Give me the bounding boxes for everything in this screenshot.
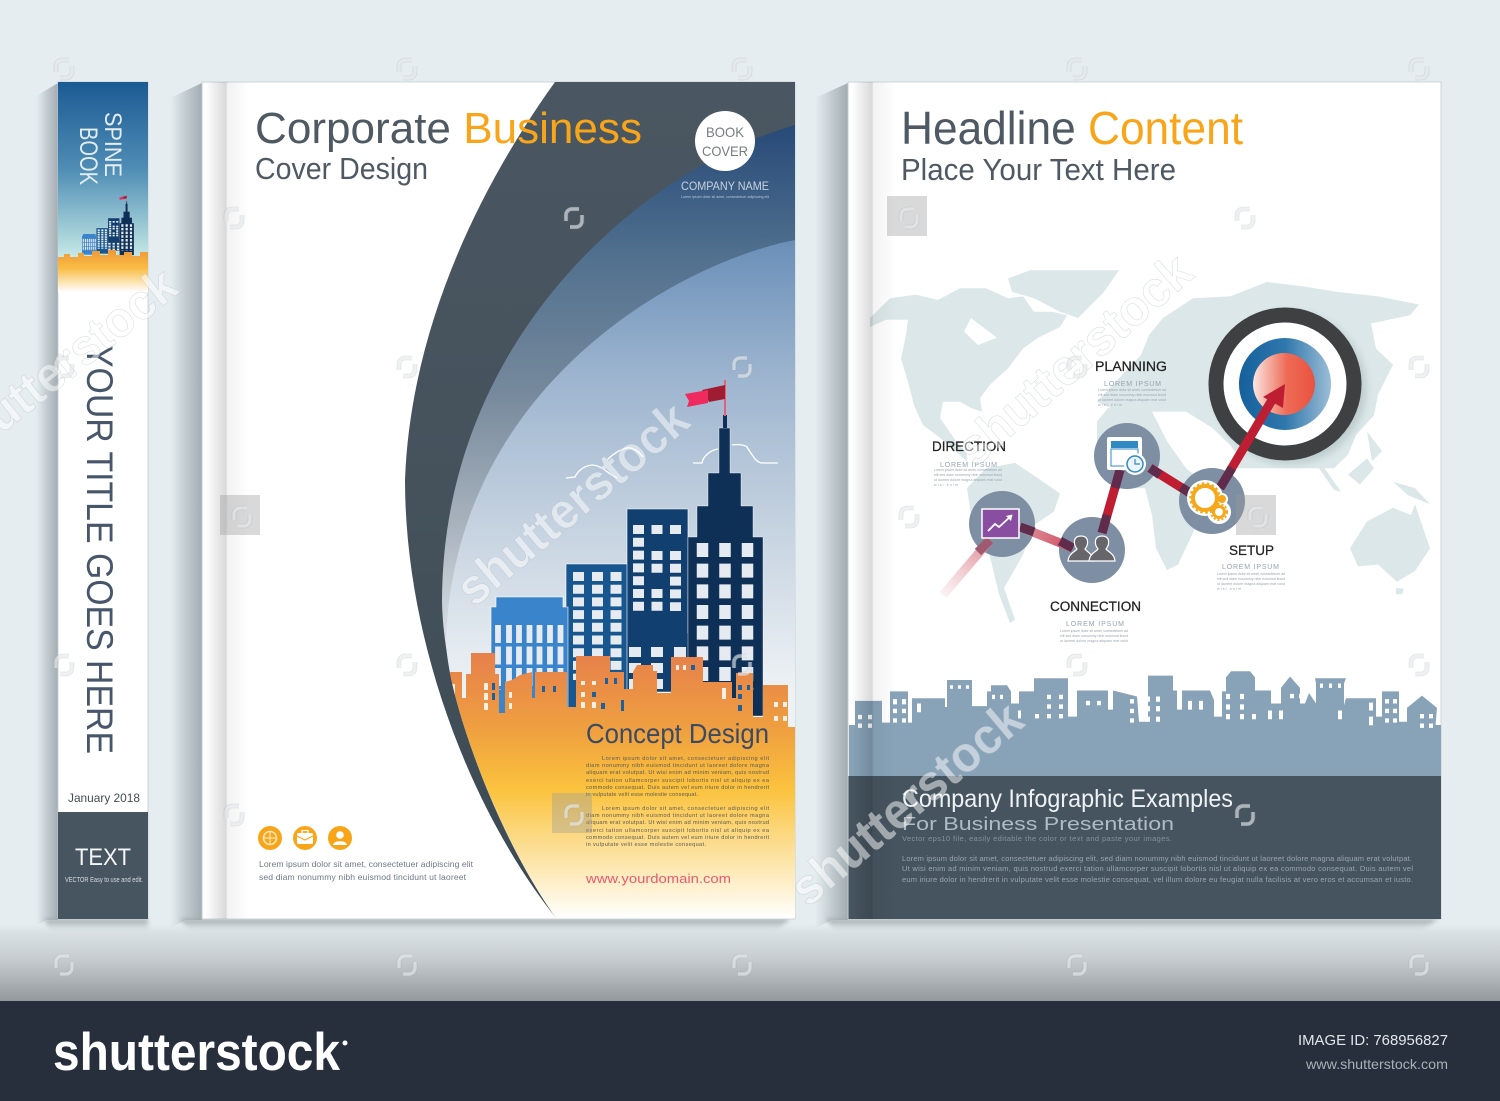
arrow head (1263, 384, 1285, 408)
label: connection: CONNECTION (1050, 599, 1141, 614)
panel: back cover (848, 82, 1441, 919)
label: direction: wisi enim (934, 483, 958, 487)
panel note: Vector eps10 file, easily editable the color or text and paste your images. (902, 834, 1172, 843)
concept design body text (586, 756, 770, 848)
cover subtitle: Cover Design (255, 151, 428, 186)
label: setup: LOREM IPSUM (1222, 564, 1279, 571)
image id: IMAGE ID: 768956827 (1298, 1032, 1448, 1049)
label: connection: Lorem ipsum dolor sit amet, consectetuer ad (1060, 629, 1128, 633)
panel body text (902, 854, 1413, 884)
panel body text: Ut wisi enim ad minim veniam, quis nostrud exerci tation ullamcorper suscipit lobortis nisl ut aliquip ex ea commodo consequat. Duis autem vel (902, 864, 1413, 873)
contact text: Lorem ipsum dolor sit amet, consectetuer adipiscing elit (259, 859, 474, 869)
spine heading: BOOK (74, 127, 102, 185)
icon: globe (258, 826, 282, 850)
contact text (259, 859, 474, 882)
concept design body text: commodo consequat. Duis autem vel eum iriure dolor in hendrerit (586, 785, 769, 791)
floor (0, 924, 1500, 1002)
label: setup: wisi enim (1217, 587, 1241, 591)
label: planning: PLANNING (1095, 359, 1167, 374)
spine city illustration (82, 195, 134, 255)
label: setup: ut laoreet dolore magna aliquam erat volut (1217, 582, 1285, 586)
shadow: spine book (36, 83, 58, 926)
panel body text: eum iriure dolor in hendrerit in vulputate velit esse molestie consequat, vel illum dolore eu feugiat nulla facilisis at vero eros et accumsan et iusto. (902, 875, 1413, 884)
icon: people (1068, 536, 1115, 561)
watermark: shutterstock text (0, 242, 1203, 916)
icon: purple chart (982, 509, 1019, 538)
label: planning: Lorem ipsum dolor sit amet, consectetuer ad (1098, 388, 1166, 392)
icon: gears (1187, 480, 1231, 524)
panel heading: Company Infographic Examples (902, 785, 1233, 813)
cover spine fold (202, 82, 250, 919)
spine orange skyline (58, 250, 148, 292)
concept design heading: Concept Design (586, 718, 769, 749)
concept design body text: aliquam erat volutpat. Ut wisi enim ad minim veniam, quis nostrud (586, 770, 769, 776)
watermark: grey logo tiles (220, 196, 1276, 833)
label: planning: elit sed diam nonummy nibh euismod tincid (1098, 393, 1166, 397)
label: direction: ut laoreet dolore magna aliquam erat volut (934, 478, 1002, 482)
spine title: YOUR TITLE GOES HERE (79, 345, 121, 754)
label: connection (1050, 599, 1141, 643)
watermark: shutterstock text: shutterstock (445, 390, 700, 616)
watermark: shutterstock text: shutterstock (945, 242, 1203, 476)
cover title: Corporate Business (255, 104, 642, 153)
spine sky (58, 82, 148, 260)
orange skyline (440, 653, 795, 919)
spine dark footer (58, 812, 148, 919)
book cover badge: COVER (702, 143, 748, 159)
panel subheading: For Business Presentation (902, 813, 1174, 834)
city buildings (491, 380, 763, 716)
label: setup: elit sed diam nonummy nibh euismod tincid (1217, 577, 1285, 581)
label: connection: LOREM IPSUM (1066, 621, 1124, 628)
watermark: corner marks (56, 60, 1427, 974)
back cover dark panel (848, 776, 1441, 919)
label: direction: DIRECTION (932, 439, 1006, 454)
book cover badge (695, 111, 755, 171)
target (1214, 312, 1366, 464)
spine date: January 2018 (68, 791, 140, 805)
label: direction: LOREM IPSUM (940, 462, 997, 469)
panel: front cover (202, 82, 795, 919)
book cover badge: BOOK (706, 124, 745, 140)
footer logo: shutterstock (53, 1023, 340, 1082)
path nodes (969, 423, 1245, 583)
cover mid curve (442, 125, 795, 918)
footer registered mark (342, 1040, 348, 1046)
watermark: shutterstock text: shutterstock (779, 690, 1034, 916)
label: setup: SETUP (1229, 543, 1274, 558)
spine footer heading: TEXT (75, 844, 131, 871)
red arrow path (943, 400, 1272, 595)
cover sky curve (446, 240, 795, 918)
concept design body text: commodo consequat. Duis autem vel eum iriure dolor in hendrerit (586, 835, 769, 841)
concept design body text: exerci tation ullamcorper suscipit lobortis nisl ut aliquip ex ea (586, 828, 770, 834)
world map (870, 270, 1430, 623)
cover dark curve (405, 82, 795, 918)
shadow: back cover (815, 83, 848, 928)
company name: COMPANY NAME (681, 179, 769, 193)
spine footer note: VECTOR Easy to use and edit. (65, 875, 143, 884)
website url: www.yourdomain.com (585, 872, 731, 886)
icon: calendar and clock (1107, 437, 1146, 475)
company name (681, 179, 770, 199)
icon: person (328, 826, 352, 850)
label: connection: elit sed diam nonummy nibh euismod tincid (1060, 634, 1128, 638)
floor shadow under books (44, 919, 1438, 931)
back cover headline: Headline Content (901, 102, 1243, 154)
label: planning: LOREM IPSUM (1104, 381, 1161, 388)
label: setup: Lorem ipsum dolor sit amet, consectetuer ad (1217, 572, 1285, 576)
concept design body text: diam nonummy nibh euismod tincidunt ut laoreet dolore magna (586, 763, 770, 769)
shadow: front cover (170, 83, 202, 928)
footer url: www.shutterstock.com (1305, 1056, 1448, 1072)
back cover spine fold (848, 82, 896, 919)
company name: Lorem ipsum dolor sit amet, consectetuer adipiscing elit (681, 194, 770, 199)
footer bar (0, 1001, 1500, 1101)
panel: spine book (58, 82, 148, 919)
spine heading (74, 112, 126, 185)
concept design body text: Lorem ipsum dolor sit amet, consectetuer adipiscing elit (602, 806, 769, 812)
label: setup (1217, 543, 1285, 591)
label: planning (1095, 359, 1167, 407)
spine heading: SPINE (99, 112, 126, 177)
label: direction (932, 439, 1006, 487)
concept design body text: aliquam erat volutpat. Ut wisi enim ad minim veniam, quis nostrud (586, 820, 769, 826)
concept design body text: diam nonummy nibh euismod tincidunt ut laoreet dolore magna (586, 813, 770, 819)
label: direction: elit sed diam nonummy nibh euismod tincid (934, 473, 1002, 477)
label: planning: wisi enim (1098, 403, 1122, 407)
label: planning: ut laoreet dolore magna aliquam erat volut (1098, 398, 1166, 402)
clouds (566, 445, 778, 478)
panel body text: Lorem ipsum dolor sit amet, consectetuer adipiscing elit, sed diam nonummy nibh euismod tincidunt ut laoreet dolore magna aliquam erat volutpat. (902, 854, 1412, 863)
label: connection: ut laoreet dolore magna aliquam erat volut (1060, 639, 1128, 643)
concept design body text: Lorem ipsum dolor sit amet, consectetuer adipiscing elit (602, 756, 769, 762)
contact text: sed diam nonummy nibh euismod tincidunt ut laoreet (259, 872, 467, 882)
concept design body text: exerci tation ullamcorper suscipit lobortis nisl ut aliquip ex ea (586, 778, 770, 784)
concept design body text: in vulputate velit esse molestie consequat. (586, 842, 706, 848)
contact icons (258, 826, 352, 850)
concept design body text: in vulputate velit esse molestie consequat. (586, 792, 698, 798)
back cover subheadline: Place Your Text Here (901, 152, 1176, 187)
back cover skyline (849, 671, 1441, 776)
label: direction: Lorem ipsum dolor sit amet, consectetuer ad (934, 468, 1002, 472)
icon: briefcase (293, 826, 317, 850)
